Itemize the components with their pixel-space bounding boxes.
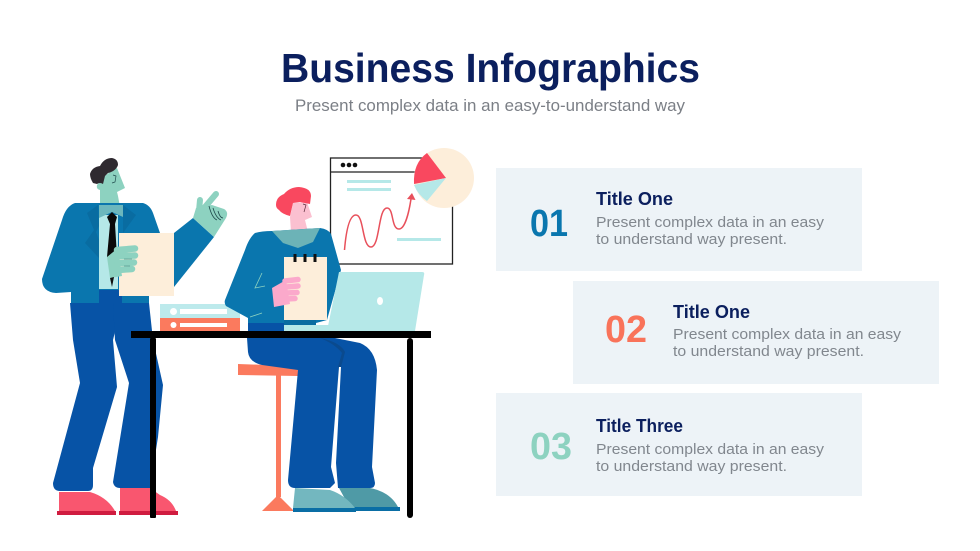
man head and neck [90, 158, 125, 207]
illustration: stool [238, 364, 298, 511]
seated man back shoe [339, 488, 400, 511]
text block one: to understand way present. [596, 231, 787, 248]
title: Business Infographics [281, 45, 700, 91]
illustration: laptop [284, 272, 424, 331]
panel: item three [496, 393, 862, 496]
text block one [596, 214, 825, 248]
seated man front leg [247, 338, 345, 488]
seated man collar [272, 228, 320, 248]
illustration: books [160, 304, 240, 331]
text block one: Present complex data in an easy [596, 214, 825, 231]
text block three: Present complex data in an easy [596, 441, 825, 458]
man shirt and collar [85, 205, 136, 303]
text block two [673, 326, 902, 360]
heading: title three: Title Three [596, 416, 683, 436]
illustration: pie chart [414, 148, 474, 208]
panel: item two [573, 281, 939, 384]
text block three: to understand way present. [596, 458, 787, 475]
man paper [119, 233, 174, 296]
man legs [53, 303, 163, 491]
man raised arm [174, 218, 214, 287]
heading: title one: Title One [673, 302, 750, 322]
seated man front shoe [293, 488, 356, 512]
subtitle: Present complex data in an easy-to-understand way [295, 96, 685, 115]
number 02: 02 [605, 309, 647, 351]
man raised hand [193, 194, 227, 237]
illustration: seated man [225, 187, 400, 512]
seated man sweater [225, 228, 341, 323]
heading: title one: Title One [596, 189, 673, 209]
seated man hand [272, 280, 298, 307]
text block two: to understand way present. [673, 343, 864, 360]
text block two: Present complex data in an easy [673, 326, 902, 343]
seated man head and neck [276, 187, 312, 232]
illustration: desk [131, 331, 431, 518]
text block three [596, 441, 825, 475]
panel: item one [496, 168, 862, 271]
number 01: 01 [530, 203, 568, 245]
man shoes [57, 488, 178, 515]
number 03: 03 [530, 426, 572, 468]
seated man waist [248, 323, 284, 332]
man hand on paper [107, 248, 135, 287]
illustration: standing man [42, 158, 227, 515]
man tie [107, 212, 117, 257]
illustration: dashboard window with chart [330, 158, 452, 264]
seated man back leg [330, 337, 377, 488]
man jacket [42, 203, 160, 303]
notepad [284, 254, 327, 320]
